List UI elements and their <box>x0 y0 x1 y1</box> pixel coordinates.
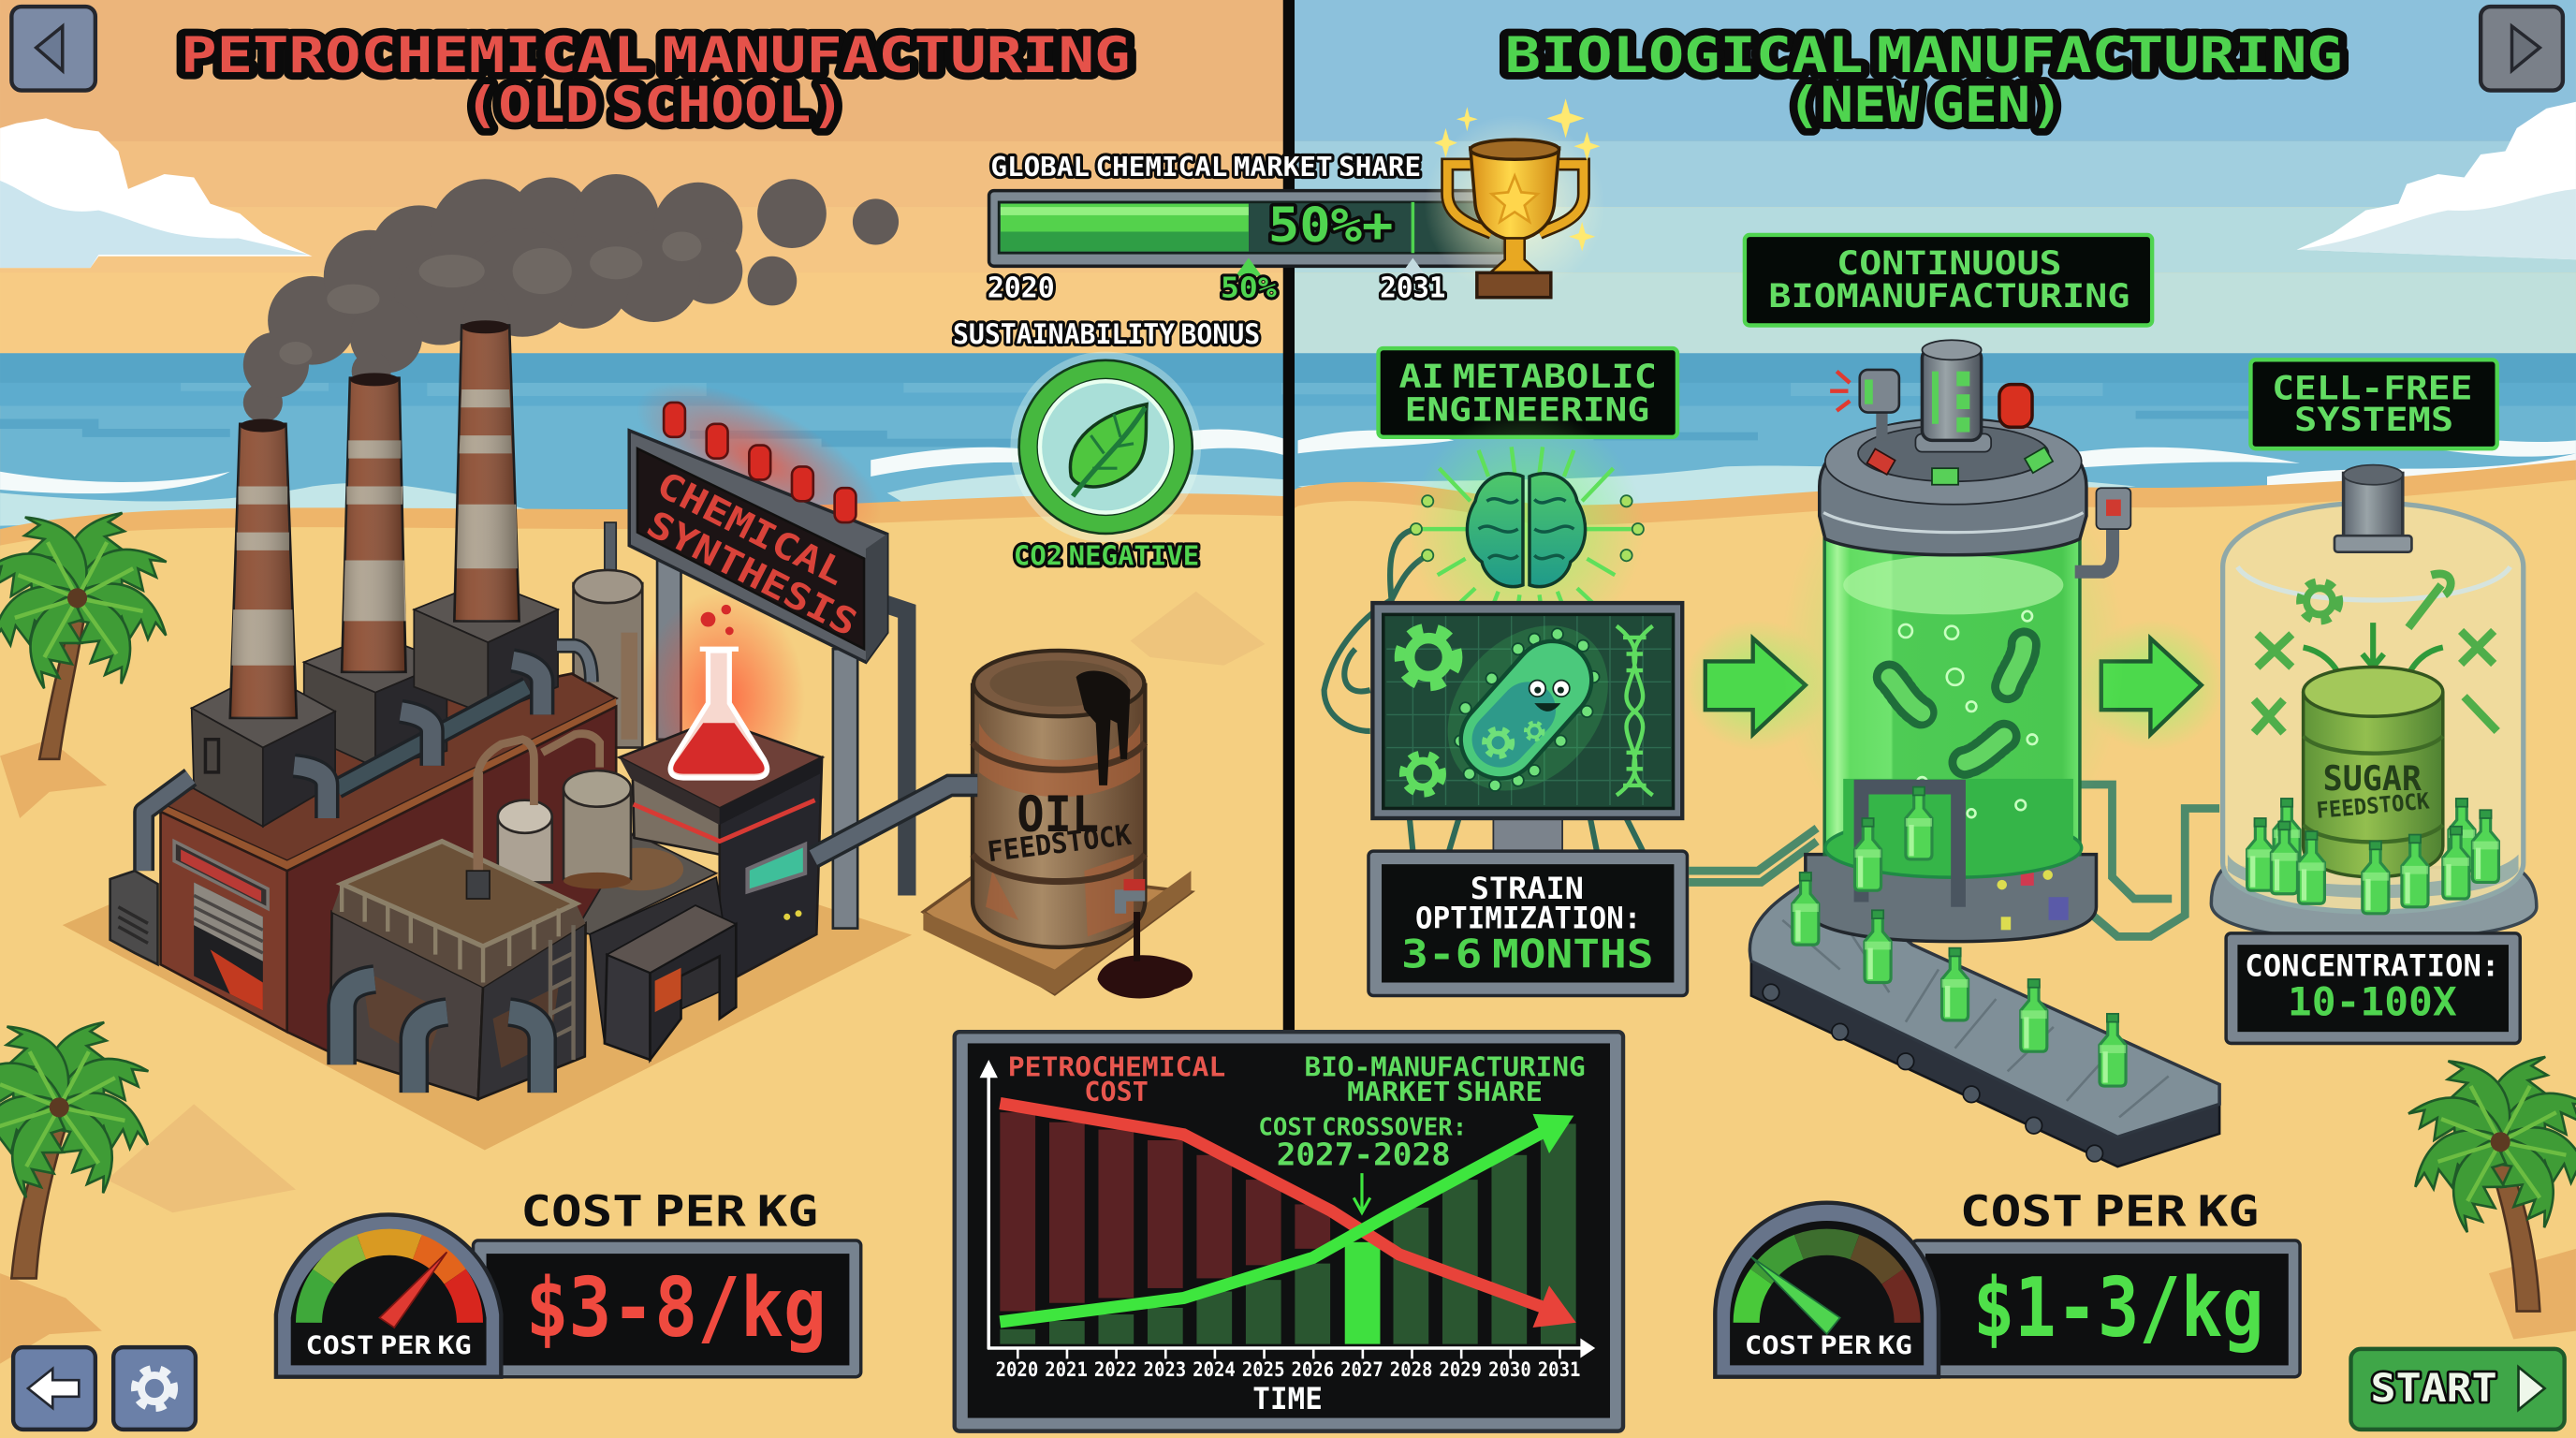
teal control display <box>748 844 805 891</box>
copper pipes <box>478 734 600 901</box>
palm shadow: lower left <box>0 1273 102 1364</box>
series label: market share: BIO-MANUFACTURING <box>1305 1052 1586 1083</box>
arrow: engineering to reactor <box>1684 620 1828 751</box>
year labels <box>996 1357 1580 1381</box>
series label: cost: PETROCHEMICAL <box>1008 1052 1225 1083</box>
button: settings <box>113 1347 196 1430</box>
title: biological <box>1505 27 2343 134</box>
concentration panel <box>2226 933 2520 1043</box>
panel label: CONCENTRATION: <box>2245 949 2499 983</box>
label line 1: AI METABOLIC <box>1398 358 1657 396</box>
button: back <box>11 7 95 91</box>
barrel label: feedstock: FEEDSTOCK <box>986 819 1134 869</box>
title: petrochemical <box>181 27 1131 134</box>
series label: market share <box>1305 1052 1586 1108</box>
sand pile: right of barrel <box>1131 592 1265 666</box>
market share curve <box>1000 1114 1573 1322</box>
sustainability label: SUSTAINABILITY BONUS <box>953 318 1260 350</box>
label 2020: 2020 <box>988 272 1055 305</box>
centre divider <box>1283 0 1295 1035</box>
oil puddle <box>1097 955 1193 998</box>
gauge label: COST PER KG <box>305 1332 472 1360</box>
screen gear bottom <box>1404 756 1442 792</box>
label 50%: 50% <box>1221 272 1277 305</box>
barrel label: sugar: SUGAR <box>2323 758 2422 799</box>
barrel label: feedstock: FEEDSTOCK <box>2315 787 2431 824</box>
year labels: 2020 <box>996 1357 1038 1381</box>
label: ai metabolic engineering <box>1379 348 1677 437</box>
tap and valve <box>1120 879 1145 914</box>
bioreactor <box>1781 340 2130 942</box>
x axis title: TIME <box>1252 1383 1323 1416</box>
left face <box>161 812 287 1032</box>
label line 2: BIOMANUFACTURING <box>1768 277 2130 315</box>
year labels: 2022 <box>1094 1357 1137 1381</box>
bottles in vessel <box>2247 799 2498 914</box>
sparkles <box>1434 98 1600 252</box>
roof <box>161 674 616 861</box>
bacterium <box>1415 594 1641 823</box>
sign heading line 1: CHEMICAL <box>650 463 852 594</box>
green pipes between vessels <box>1689 785 2219 936</box>
vessel stem <box>2344 473 2403 539</box>
door warning sign <box>174 842 268 909</box>
side camera <box>1830 370 1899 440</box>
year labels: 2029 <box>1439 1357 1482 1381</box>
title line 1: BIOLOGICAL MANUFACTURING <box>1505 27 2343 84</box>
exit portal frame <box>1862 787 1958 907</box>
year labels: 2026 <box>1292 1357 1334 1381</box>
year labels: 2025 <box>1242 1357 1284 1381</box>
panel line 1: STRAIN <box>1471 871 1584 906</box>
label 2031: 2031 <box>1380 272 1445 305</box>
factory main building <box>110 674 616 1051</box>
palm shadow: lower right <box>2489 1249 2576 1339</box>
smoke plume <box>243 174 899 422</box>
cost gauge: petrochemical <box>276 1186 861 1377</box>
smokestack 1 <box>230 419 297 718</box>
conveyor belt <box>1749 871 2219 1167</box>
sign heading line 2: SYNTHESIS <box>639 503 864 645</box>
screen gear top <box>1402 631 1456 684</box>
palm shadow: upper left <box>0 740 107 818</box>
bacteria in tank <box>1889 644 2024 762</box>
label: continuous biomanufacturing <box>1745 235 2152 325</box>
factory pipes: front <box>342 979 542 1093</box>
brain <box>1408 411 1645 647</box>
red beacon <box>1999 385 2032 427</box>
enzyme tools <box>2254 574 2497 733</box>
vertical feed pipe <box>474 772 483 874</box>
sand pile: lower left <box>107 1104 296 1212</box>
background: old school sky <box>0 0 1290 355</box>
label: cell-free systems <box>2250 360 2497 448</box>
cost bars <box>1000 1112 1330 1312</box>
panel value: 10-100X <box>2288 979 2457 1025</box>
button: back arrow <box>13 1347 95 1430</box>
needle <box>1751 1257 1840 1334</box>
crossover callout <box>1258 1113 1467 1172</box>
back tank <box>574 522 642 748</box>
background: new gen sky <box>1290 0 2576 355</box>
ladder <box>550 925 574 1068</box>
year labels: 2027 <box>1340 1357 1383 1381</box>
smokestack 2 <box>342 373 406 672</box>
background: ocean <box>0 353 2576 550</box>
palm: lower left <box>0 1009 157 1278</box>
sustainability badge <box>1010 352 1201 542</box>
title line 2: (OLD SCHOOL) <box>465 77 844 134</box>
value: $3-8/kg <box>526 1260 827 1356</box>
oil stream <box>1134 912 1140 961</box>
button: forward <box>2481 7 2563 91</box>
front rusted tank block <box>330 772 586 1099</box>
stack base 2 <box>304 634 446 768</box>
series label: cost <box>1008 1052 1225 1108</box>
dial segments <box>1747 1242 1908 1323</box>
dna helix <box>1617 626 1653 795</box>
sugar barrel <box>2304 694 2443 877</box>
series label: cost: COST <box>1084 1077 1149 1108</box>
crossover callout: 2027-2028 <box>1277 1136 1451 1172</box>
monitor <box>1372 594 1682 853</box>
railing <box>342 842 576 946</box>
gauge label: COST PER KG <box>1745 1332 1912 1360</box>
factory ground shadow <box>63 772 912 1151</box>
bubbles <box>1899 611 2037 817</box>
year labels: 2031 <box>1538 1357 1580 1381</box>
marker 2031 <box>1399 258 1426 276</box>
title line 1: PETROCHEMICAL MANUFACTURING <box>181 27 1131 84</box>
pipe: back right column <box>877 601 907 895</box>
year labels: 2021 <box>1045 1357 1088 1381</box>
trophy <box>1425 98 1605 298</box>
flask bubbles <box>701 605 734 635</box>
co2 negative label: CO2 NEGATIVE <box>1014 541 1199 572</box>
sign lamp glow <box>615 352 903 568</box>
dome indicators <box>1867 448 1895 475</box>
heading: COST PER KG <box>1960 1186 2259 1236</box>
industrial sign <box>615 352 903 662</box>
cost curve <box>1000 1104 1576 1328</box>
flask glow <box>641 592 805 805</box>
rust patch on floor <box>598 848 683 890</box>
axes <box>988 1068 1586 1349</box>
marker 50% <box>1236 258 1262 276</box>
right wing with door <box>605 905 736 1060</box>
cost gauge: biological <box>1715 1186 2300 1377</box>
palm: lower right <box>2403 1044 2576 1312</box>
year labels: 2023 <box>1144 1357 1186 1381</box>
sign lamps <box>664 403 856 522</box>
label line 1: CONTINUOUS <box>1837 244 2062 283</box>
needle <box>379 1252 446 1328</box>
reactor base <box>1806 855 2096 942</box>
value 50%+: 50%+ <box>1268 198 1393 254</box>
button: start <box>2351 1349 2565 1430</box>
stack base 3 <box>414 581 558 714</box>
market share bars <box>1000 1123 1576 1344</box>
sign support posts <box>657 534 857 929</box>
side valve <box>2075 529 2113 572</box>
wires: brain to monitor <box>1325 529 1427 731</box>
crossover highlight bar <box>1345 1242 1380 1344</box>
roller door <box>194 882 263 1010</box>
oil barrel <box>973 651 1145 947</box>
market share bar <box>988 152 1508 305</box>
reactor column <box>1915 433 1991 452</box>
series label: market share: MARKET SHARE <box>1347 1077 1543 1108</box>
leaf <box>1070 404 1147 496</box>
pipe: to barrel <box>813 785 977 858</box>
panel value: 3-6 MONTHS <box>1401 932 1653 977</box>
flask platform <box>620 720 822 986</box>
yellow switches <box>783 910 802 920</box>
value: $1-3/kg <box>1973 1260 2263 1356</box>
year labels: 2028 <box>1390 1357 1432 1381</box>
axis arrowheads <box>980 1060 1595 1358</box>
dark machinery block <box>590 877 733 1043</box>
axis ticks <box>1017 1349 1559 1358</box>
title line 2: (NEW GEN) <box>1788 77 2063 134</box>
barrel label: oil: OIL <box>1017 786 1099 844</box>
crossover arrow <box>1354 1173 1370 1212</box>
start label: START <box>2371 1365 2497 1411</box>
pallet under barrel <box>923 868 1191 994</box>
factory pipes: upper <box>144 646 592 871</box>
panel line 2: OPTIMIZATION: <box>1415 901 1641 936</box>
reactor dome <box>1820 419 2086 555</box>
background: beach sand <box>0 460 2576 1438</box>
crossover chart <box>955 1032 1623 1431</box>
strain optimization panel <box>1368 851 1687 996</box>
tanks <box>498 770 631 888</box>
cell-free glass vessel <box>2211 465 2537 940</box>
market share label: GLOBAL CHEMICAL MARKET SHARE <box>990 152 1421 183</box>
stack base 1 <box>192 672 335 827</box>
crossover callout: COST CROSSOVER: <box>1258 1113 1467 1141</box>
label line 1: CELL-FREE <box>2272 369 2472 407</box>
bottles on conveyor <box>1793 787 2126 1086</box>
year labels: 2030 <box>1488 1357 1531 1381</box>
small utility box <box>110 871 158 964</box>
red neon strip <box>634 800 815 842</box>
cloud: right <box>2297 102 2576 259</box>
label line 2: SYSTEMS <box>2294 401 2453 439</box>
oil drips <box>1076 671 1131 785</box>
year labels: 2024 <box>1193 1357 1236 1381</box>
smokestack 3 <box>454 320 520 621</box>
rays <box>1421 447 1632 627</box>
right face <box>287 707 616 1051</box>
dial segments <box>309 1242 470 1323</box>
rollers <box>1763 984 2102 1162</box>
central grey floor <box>576 833 716 934</box>
cloud: left <box>0 118 313 268</box>
glass tank <box>1824 539 2080 855</box>
arrow: reactor to cell-free <box>2080 620 2224 751</box>
palm: upper left <box>0 500 176 759</box>
heading: COST PER KG <box>520 1186 818 1236</box>
start arrow <box>2519 1367 2545 1410</box>
label line 2: ENGINEERING <box>1405 390 1649 429</box>
red flask <box>670 605 768 778</box>
